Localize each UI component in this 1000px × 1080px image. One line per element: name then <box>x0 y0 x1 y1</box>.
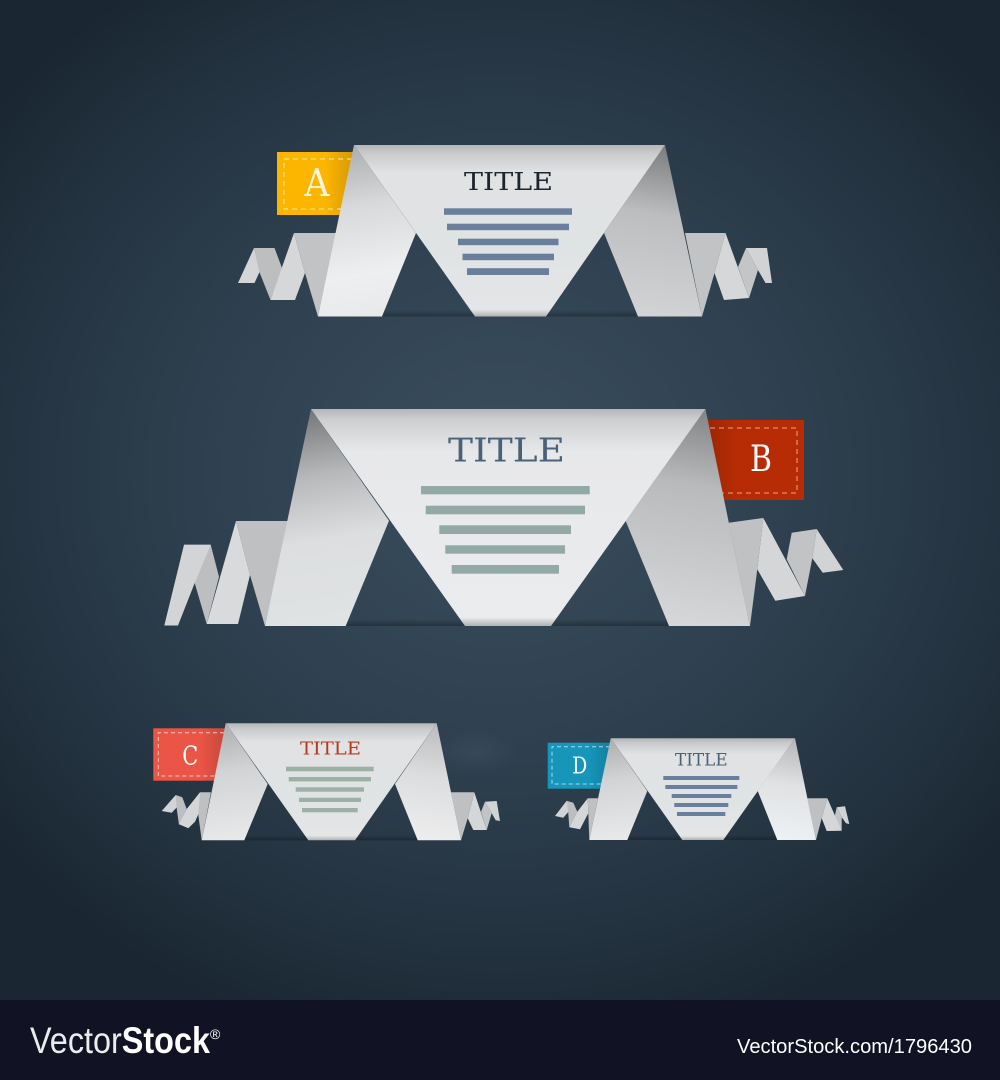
tag D <box>548 743 613 789</box>
tag C <box>153 728 226 781</box>
right paper folds C <box>451 792 500 840</box>
floor shadow C <box>244 835 418 840</box>
right paper folds B <box>729 518 843 626</box>
left leg C <box>202 723 268 840</box>
title C: TITLE <box>300 738 361 759</box>
floor shadow B <box>346 619 670 626</box>
title B: TITLE <box>448 431 565 470</box>
left leg D <box>589 738 647 840</box>
main panel A <box>354 145 665 316</box>
main panel C <box>226 723 437 840</box>
text lines B <box>421 486 590 574</box>
left paper folds A <box>238 233 336 316</box>
footer image id: VectorStock.com/1796430 <box>737 1036 972 1058</box>
tag A: A <box>303 161 330 205</box>
tag B: B <box>750 439 772 480</box>
main panel B <box>311 409 706 626</box>
footer logo: VectorStock <box>30 1020 210 1061</box>
text lines C <box>286 767 374 812</box>
banner B <box>164 409 843 626</box>
floor shadow D <box>627 835 778 840</box>
tag B <box>704 420 804 500</box>
left leg B <box>265 409 389 626</box>
main panel D <box>611 738 795 840</box>
banner A <box>238 145 772 316</box>
tag D: D <box>572 753 587 779</box>
registered mark: ® <box>210 1026 221 1042</box>
floor shadow A <box>382 310 638 316</box>
left paper folds D <box>555 798 598 840</box>
title D: TITLE <box>675 751 728 771</box>
text lines A <box>444 208 572 275</box>
right leg D <box>758 738 816 840</box>
tag A <box>277 152 354 215</box>
right paper folds D <box>807 798 849 840</box>
right leg A <box>604 145 702 316</box>
tag C: C <box>182 742 198 772</box>
text lines D <box>663 776 739 816</box>
banner C <box>153 723 500 840</box>
right leg C <box>395 723 461 840</box>
left paper folds C <box>162 792 211 840</box>
footer bar <box>0 1000 1000 1080</box>
left paper folds B <box>164 521 288 626</box>
right paper folds A <box>685 233 772 316</box>
left leg A <box>318 145 416 316</box>
right leg B <box>626 409 750 626</box>
banner D <box>548 738 849 840</box>
title A: TITLE <box>464 167 553 196</box>
